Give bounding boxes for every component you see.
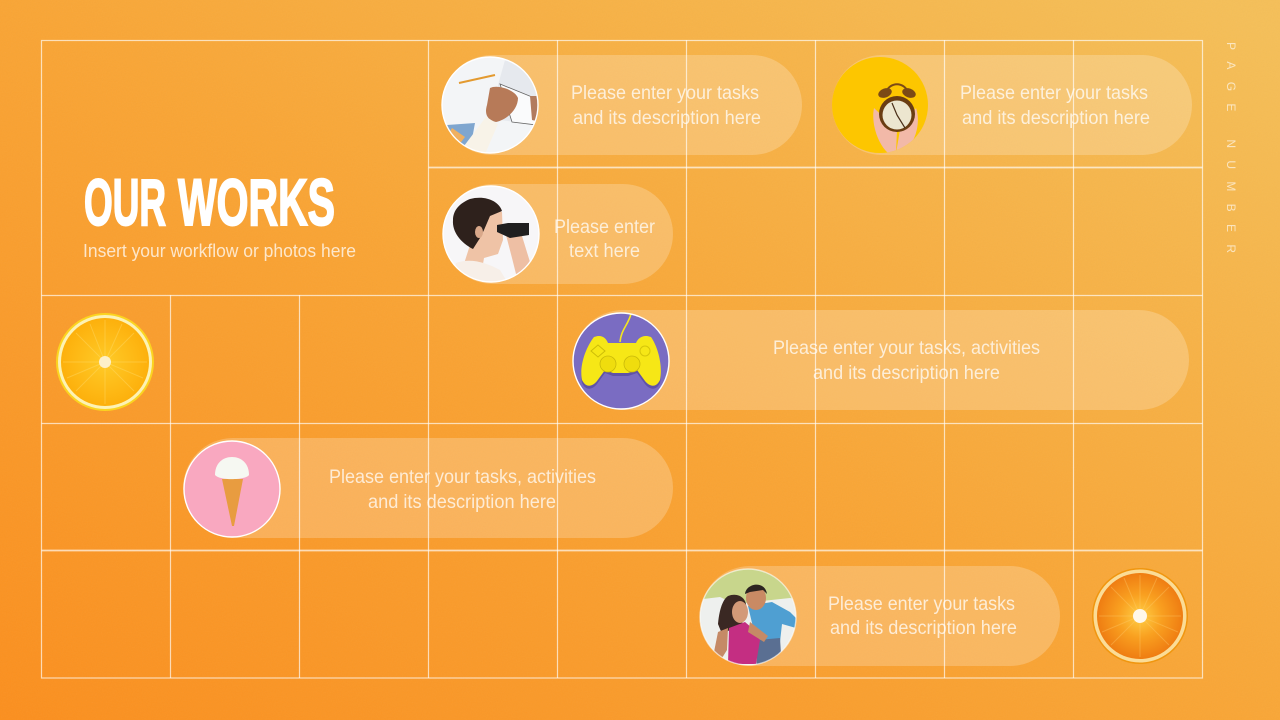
page number: PAGE NUMBER	[1224, 42, 1238, 253]
photo: person with binoculars	[440, 185, 540, 290]
photo: smiling couple	[699, 568, 797, 666]
pill: task top right	[832, 55, 1192, 155]
text: task top left: and its description here	[573, 108, 761, 129]
text: task top left	[571, 83, 761, 129]
text: controller task	[773, 338, 1040, 384]
photo: hands on keyboard	[440, 55, 540, 158]
photo: alarm clock in hands	[832, 57, 928, 153]
title: WORKS	[178, 165, 335, 239]
photo: yellow game controller	[573, 313, 669, 409]
text: couple task: Please enter your tasks	[828, 594, 1015, 615]
text: couple task	[828, 594, 1017, 639]
pill: ice cream task	[183, 438, 673, 538]
text: controller task: and its description here	[813, 363, 1000, 384]
text: task top right: Please enter your tasks	[960, 83, 1148, 104]
pill: task top left	[442, 55, 802, 155]
title: OUR	[84, 165, 166, 239]
photo: ice cream cone	[184, 441, 280, 537]
pill: controller task	[573, 310, 1189, 410]
text: controller task: Please enter your tasks, activities	[773, 338, 1040, 359]
pill: short text	[443, 184, 673, 284]
text: couple task: and its description here	[830, 618, 1017, 639]
icon: deep orange slice	[1092, 568, 1188, 664]
icon: yellow orange slice	[56, 313, 154, 411]
text: task top right	[960, 83, 1150, 129]
text: task top right: and its description here	[962, 108, 1150, 129]
text: short text: Please enter	[554, 217, 656, 238]
text: ice cream task	[329, 467, 596, 513]
text: ice cream task: and its description here	[368, 492, 556, 513]
title	[84, 165, 335, 239]
subtitle: Insert your workflow or photos here	[83, 241, 356, 261]
text: short text	[554, 217, 656, 262]
text: task top left: Please enter your tasks	[571, 83, 759, 104]
text: ice cream task: Please enter your tasks, activities	[329, 467, 596, 488]
text: short text: text here	[569, 241, 640, 262]
pill: couple task	[700, 566, 1060, 666]
